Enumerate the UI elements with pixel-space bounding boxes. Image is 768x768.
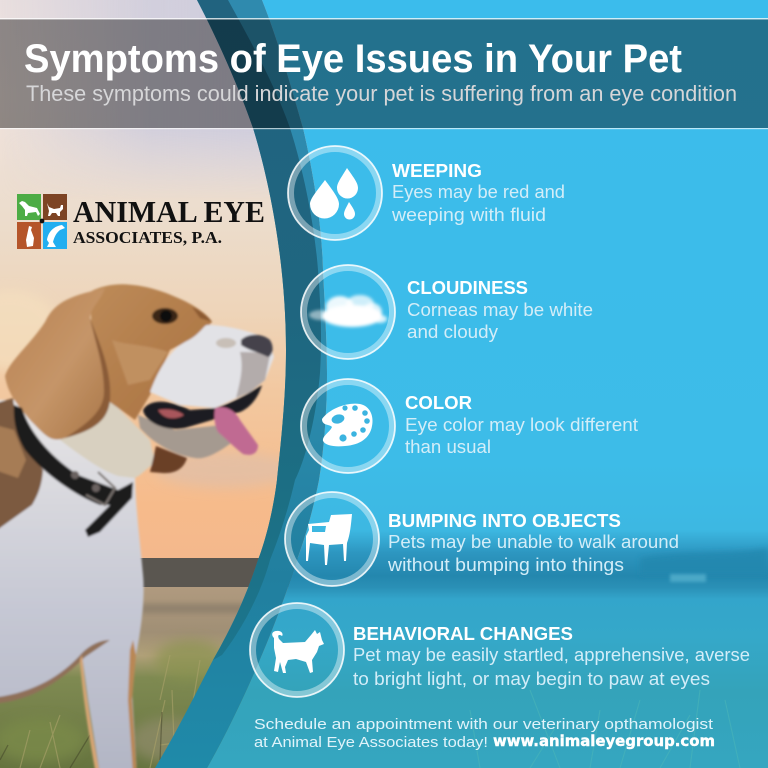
item: weeping — [288, 146, 565, 240]
item: weeping: Eyes may be red and — [392, 182, 565, 202]
item: color — [301, 379, 638, 473]
cloudiness text: CLOUDINESS — [407, 278, 528, 298]
color text: COLOR — [405, 393, 472, 413]
header banner — [0, 18, 768, 129]
footer call to action — [254, 716, 715, 751]
title: Symptoms of Eye Issues in Your Pet — [24, 37, 682, 81]
background: sunset sky — [0, 0, 327, 558]
background: horizon tree line and grass field — [0, 558, 320, 768]
item: behavioral changes: to bright light, or may begin to paw at eyes — [353, 669, 710, 689]
item: color: than usual — [405, 437, 491, 457]
curved band: dark teal — [197, 0, 321, 660]
item: cloudiness — [301, 265, 593, 359]
item: behavioral changes — [250, 603, 750, 697]
item: behavioral changes: Pet may be easily startled, apprehensive, averse — [353, 645, 750, 665]
logo: Animal Eye Associates — [17, 194, 265, 249]
item: weeping: weeping with fluid — [391, 205, 546, 225]
nose — [241, 335, 273, 357]
curved band: medium teal — [155, 0, 327, 768]
lower jaw — [138, 415, 235, 458]
icon: armchair — [285, 492, 379, 586]
icon: dog — [250, 603, 344, 697]
head — [90, 284, 212, 420]
dark jowl — [150, 446, 187, 473]
weeping text: WEEPING — [392, 161, 482, 181]
subtitle: These symptoms could indicate your pet is suffering from an eye condition — [26, 81, 737, 106]
footer call to action: Schedule an appointment with our veterinary opthamologist — [254, 716, 714, 733]
item: cloudiness: and cloudy — [407, 322, 498, 342]
brown back patch — [0, 398, 43, 535]
item: bumping into objects: Pets may be unable to walk around — [388, 532, 679, 552]
white muzzle — [150, 325, 274, 408]
dog body — [0, 400, 144, 768]
item: bumping into objects: without bumping into things — [387, 555, 624, 575]
footer call to action: at Animal Eye Associates today! — [254, 734, 488, 751]
beagle illustration — [0, 284, 274, 768]
mouth — [143, 385, 262, 429]
icon: cloud — [301, 265, 395, 359]
item: color: Eye color may look different — [405, 415, 638, 435]
logo icon: four animal tiles — [17, 194, 67, 249]
item: cloudiness: Corneas may be white — [407, 300, 593, 320]
bumping text: BUMPING INTO OBJECTS — [388, 511, 621, 531]
behavioral text: BEHAVIORAL CHANGES — [353, 624, 573, 644]
body shading — [0, 640, 110, 704]
ear — [5, 288, 110, 439]
collar — [14, 405, 133, 537]
item: bumping into objects — [285, 492, 679, 586]
icon: water drops — [288, 146, 382, 240]
website: www.animaleyegroup.com — [493, 732, 715, 750]
eye — [152, 308, 178, 324]
tongue — [214, 407, 258, 455]
icon: paint palette — [301, 379, 395, 473]
neck cream — [60, 400, 155, 478]
logo tagline: ASSOCIATES, P.A. — [73, 228, 222, 247]
logo wordmark: ANIMAL EYE — [73, 194, 265, 229]
bright blue field with faded landscape — [180, 0, 768, 768]
